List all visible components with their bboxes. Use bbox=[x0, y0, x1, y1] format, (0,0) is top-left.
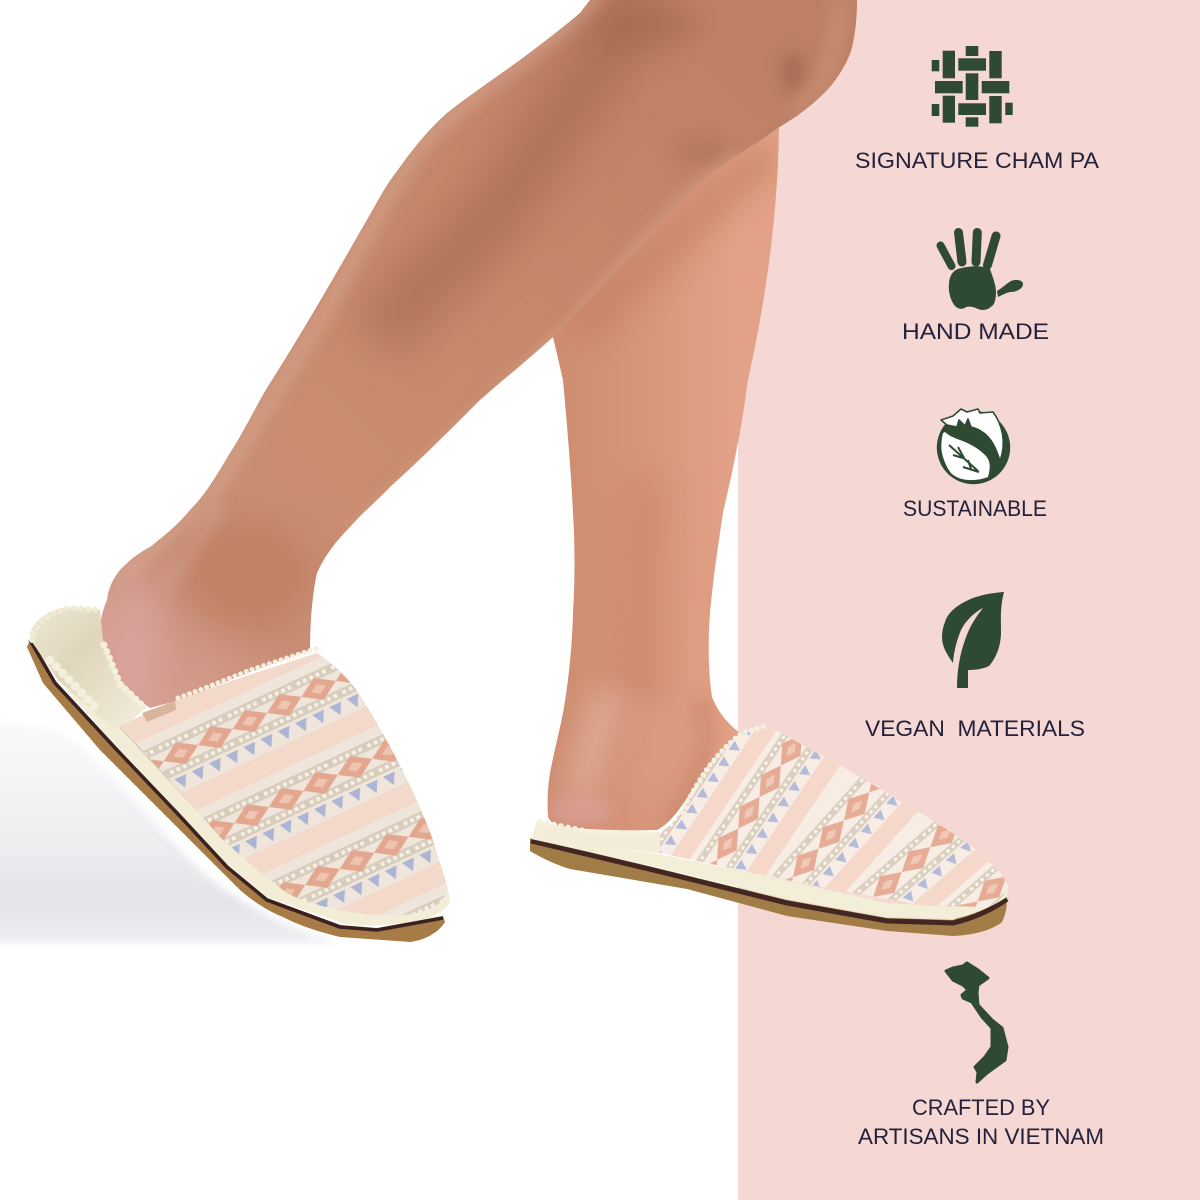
pale lit upper edge bbox=[120, 0, 600, 580]
cream foam rim bbox=[531, 837, 1008, 919]
ankle warm tone bbox=[180, 520, 310, 630]
heading: signature cham pa: SIGNATURE CHAM PA bbox=[855, 148, 1099, 173]
icon: hand print bbox=[940, 232, 1023, 310]
icon: vegan leaf bbox=[942, 592, 1004, 688]
icon: woven cham pa bbox=[932, 46, 1013, 127]
floor shadow bbox=[0, 710, 340, 943]
icon: sustainable leaf badge bbox=[937, 409, 1010, 484]
heading: hand made: HAND MADE bbox=[902, 319, 1049, 344]
front leg bbox=[100, 0, 857, 708]
label tab bbox=[142, 701, 176, 722]
fur trim on opening bbox=[682, 726, 765, 812]
dark midsole stripe bbox=[30, 640, 443, 930]
sherpa fur collar bbox=[30, 608, 147, 730]
left slipper bbox=[27, 605, 450, 942]
fur trim on opening bbox=[178, 648, 318, 698]
dark midsole stripe bbox=[531, 841, 1007, 923]
heel pink tone bbox=[113, 585, 164, 674]
dark central band on thigh bbox=[380, 0, 640, 340]
woven upper bbox=[121, 653, 447, 916]
cream foam rim bbox=[58, 680, 450, 925]
heading: vegan materials: VEGAN MATERIALS bbox=[865, 716, 1085, 741]
rear leg bbox=[546, 100, 779, 830]
heading: crafted by artisans in vietnam: ARTISANS IN VIETNAM bbox=[858, 1124, 1104, 1149]
light along lower edge bbox=[350, 160, 740, 540]
icon: vietnam map bbox=[946, 963, 1007, 1082]
knee dimple bbox=[781, 52, 805, 92]
sherpa fur collar bbox=[532, 820, 660, 853]
panel: pink background bbox=[738, 0, 1200, 1200]
heading: crafted by artisans in vietnam: CRAFTED BY bbox=[912, 1095, 1050, 1120]
woven upper bbox=[660, 726, 1008, 907]
right slipper bbox=[530, 724, 1008, 936]
cork sole bbox=[530, 838, 1007, 936]
cork sole bbox=[27, 640, 445, 942]
heading: sustainable: SUSTAINABLE bbox=[903, 496, 1047, 521]
heading: crafted by artisans in vietnam bbox=[858, 1095, 1104, 1149]
